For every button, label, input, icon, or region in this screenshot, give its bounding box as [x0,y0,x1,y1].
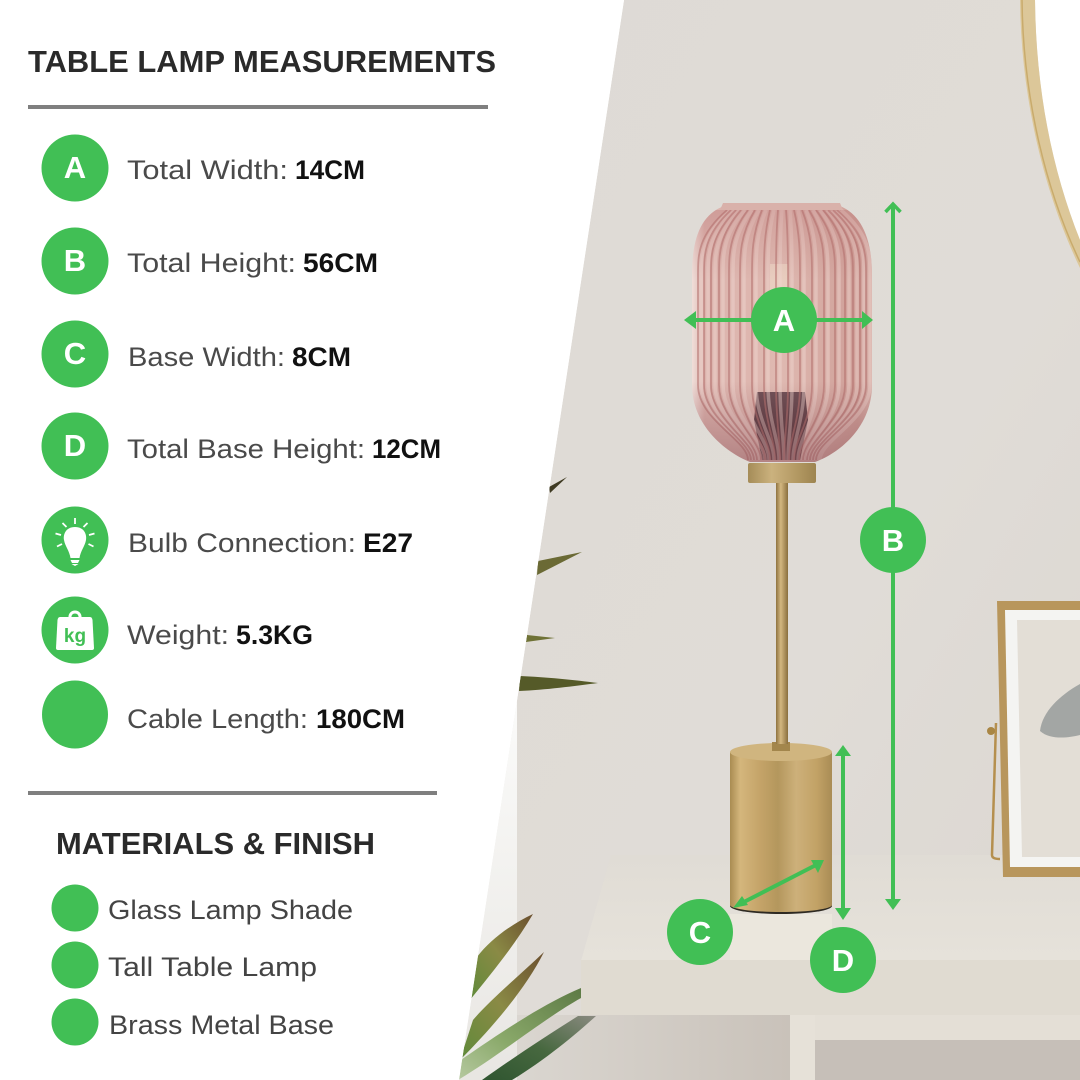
glass lamp shade [692,203,872,462]
row: total height: B [64,243,86,278]
row: total width: Total Width: [127,155,288,185]
lower divider [28,791,437,795]
material: tall table lamp [52,942,317,988]
row: total base height: D [64,428,86,463]
row: total base height [42,412,441,480]
lamp collar [748,463,816,483]
row: cable length: 180CM [316,704,405,734]
top divider [28,105,488,109]
row: total height: 56CM [303,248,378,278]
row: total width [42,134,365,202]
arrow D: base height: D [832,943,854,978]
row: bulb connection: Bulb Connection: [128,528,356,558]
row: total height [42,228,378,294]
row: cable length [42,680,405,748]
row: cable length: Cable Length: [127,704,308,734]
arrow C: base width: C [689,915,711,950]
row: bulb connection [42,506,413,574]
row: base width: C [64,336,86,371]
row: base width: 8CM [292,342,351,372]
white left panel background [0,0,624,1080]
row: total width: A [64,150,86,185]
row: total width: 14CM [295,155,365,185]
row: base width: Base Width: [128,342,285,372]
row: weight: 5.3KG [236,620,313,650]
mirror with brass frame [1020,0,1080,268]
material: glass lamp shade: Glass Lamp Shade [108,895,353,925]
row: weight: Weight: [127,620,229,650]
icon: light bulb [56,518,94,566]
title: TABLE LAMP MEASUREMENTS [28,44,496,79]
arrow B: total height [860,204,926,910]
arrow A: shade width [684,287,873,353]
material: glass lamp shade [52,884,353,932]
row: total base height: Total Base Height: [127,434,365,464]
plant leaves [458,477,598,1080]
material: brass metal base: Brass Metal Base [109,1010,334,1040]
row: total base height: 12CM [372,434,441,464]
picture frame [987,601,1080,877]
row: base width [42,320,351,388]
heading: materials and finish: MATERIALS & FINISH [56,826,375,861]
row: weight [42,596,313,664]
arrow B: total height: B [882,523,904,558]
arrow D: base height [810,745,876,993]
icon: kg weight bag [56,612,94,650]
arrow C: base width [667,860,824,965]
material: brass metal base [52,998,334,1046]
row: bulb connection: E27 [363,528,413,558]
row: total height: Total Height: [127,248,296,278]
lamp base [730,742,832,914]
material: tall table lamp: Tall Table Lamp [108,952,317,982]
arrow A: shade width: A [773,303,795,338]
background photo of lamp on table [450,0,1080,1080]
lamp stem [776,482,788,744]
table [532,913,1080,1080]
icon: kg weight bag: kg [64,626,86,647]
